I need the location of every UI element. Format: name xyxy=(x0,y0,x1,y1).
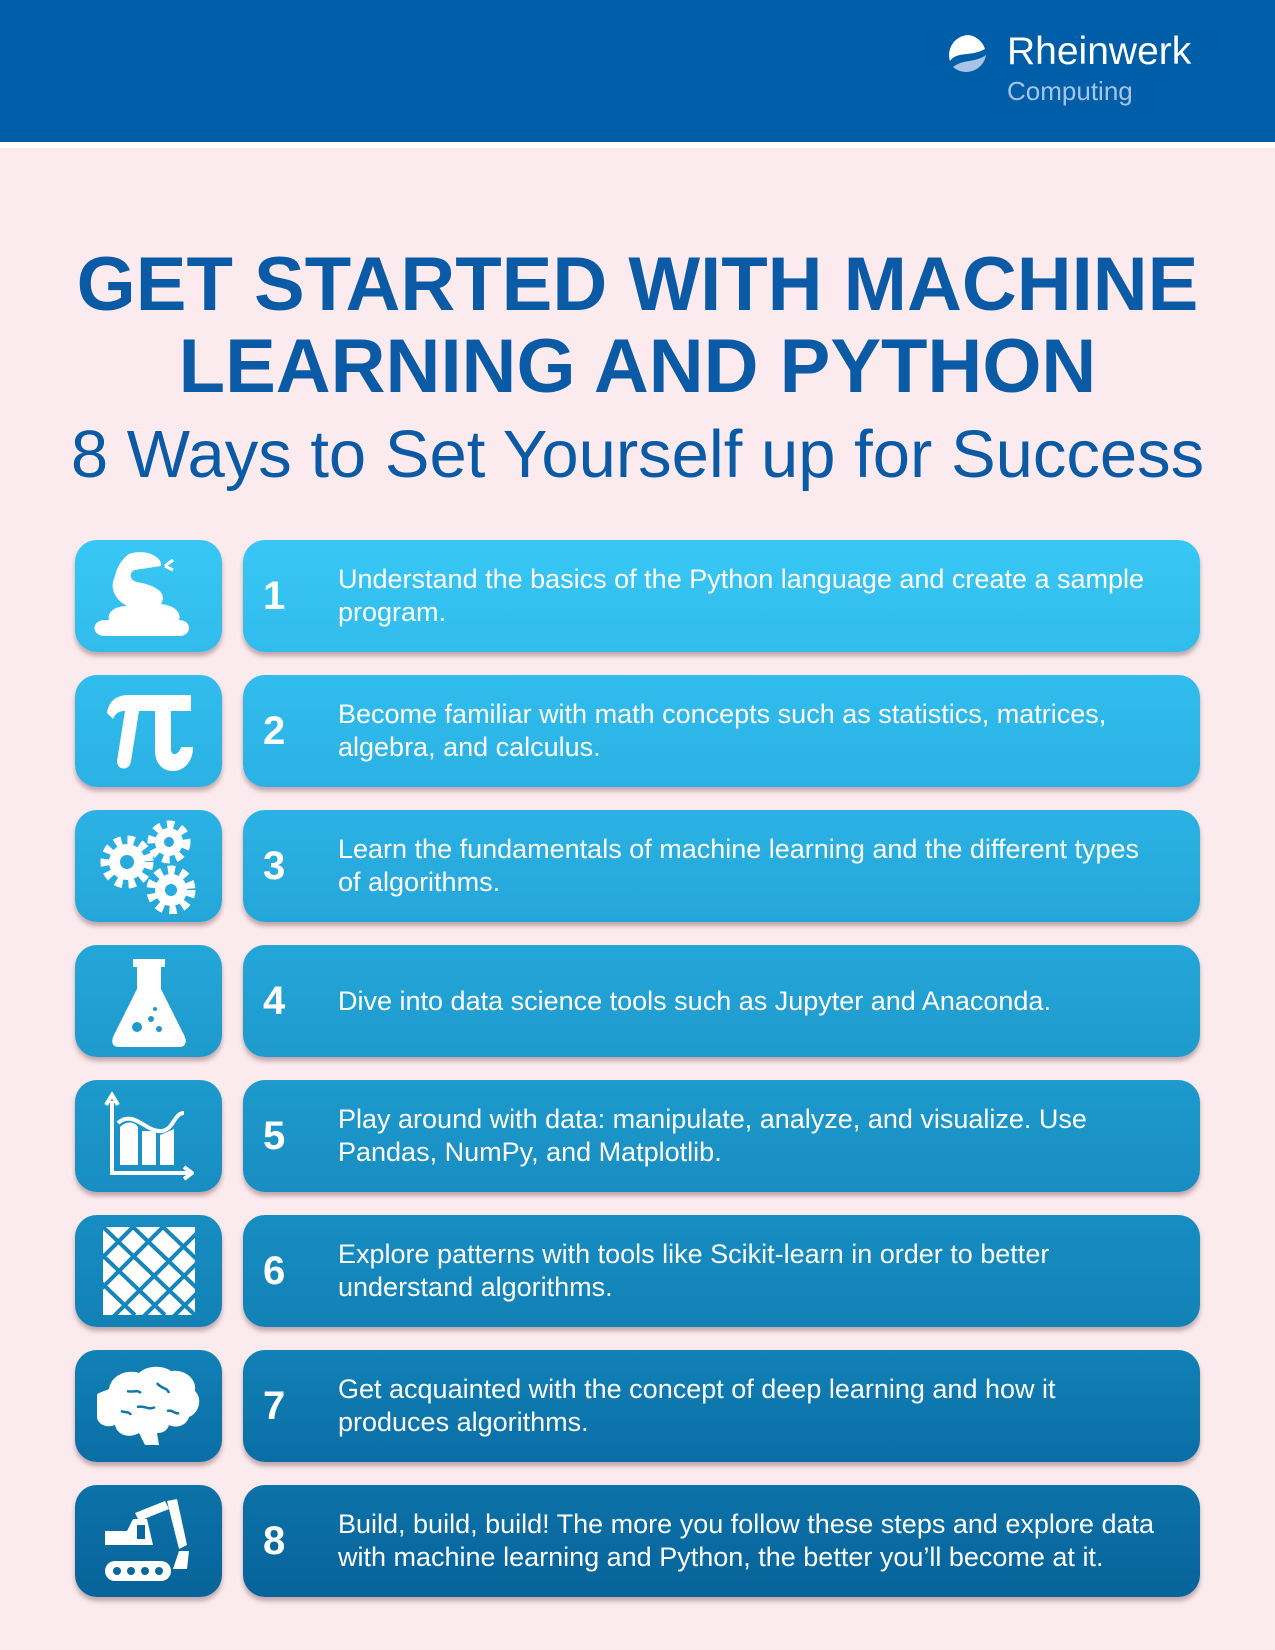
logo: Rheinwerk xyxy=(1007,30,1191,73)
step 3 box: 3 xyxy=(263,844,285,888)
subtitle: 8 Ways to Set Yourself up for Success xyxy=(71,417,1204,492)
title: LEARNING AND PYTHON xyxy=(179,324,1096,409)
icon: brain xyxy=(75,1350,222,1462)
step 1 box: 1 xyxy=(263,574,285,618)
icon: snake xyxy=(75,540,222,652)
step 3 box: Learn the fundamentals of machine learning and the different types of algorithms. xyxy=(338,834,1139,897)
step 8 box: Build, build, build! The more you follow these steps and explore data with machine learning and Python, the better you’ll become at it. xyxy=(338,1509,1154,1572)
row 8 xyxy=(72,1485,1203,1604)
icon: gears xyxy=(75,810,222,922)
header band xyxy=(0,0,1275,142)
step 5 box: 5 xyxy=(263,1114,285,1158)
step 4 box: Dive into data science tools such as Jupyter and Anaconda. xyxy=(338,986,1051,1016)
step 8 box: 8 xyxy=(263,1518,285,1562)
icon: pattern xyxy=(75,1215,222,1327)
row 5 xyxy=(72,1080,1203,1199)
icon: flask xyxy=(75,945,222,1057)
row 1 xyxy=(72,540,1203,659)
row 7 xyxy=(72,1350,1203,1469)
step 7 box: 7 xyxy=(263,1384,285,1428)
step 8 box xyxy=(243,1485,1200,1597)
step 6 box xyxy=(243,1215,1200,1327)
step 4 box xyxy=(243,945,1200,1057)
step 1 box: Understand the basics of the Python language and create a sample program. xyxy=(338,564,1144,627)
row 6 xyxy=(72,1215,1203,1334)
step 4 box: 4 xyxy=(263,978,285,1022)
step 2 box xyxy=(243,675,1200,787)
step 7 box xyxy=(243,1350,1200,1462)
icon: excavator xyxy=(75,1485,222,1597)
row 4 xyxy=(72,945,1203,1064)
icon: chart xyxy=(75,1080,222,1192)
step 5 box: Play around with data: manipulate, analyze, and visualize. Use Pandas, NumPy, and Matplotlib. xyxy=(338,1104,1087,1167)
step 3 box xyxy=(243,810,1200,922)
icon: pi xyxy=(75,675,222,787)
step 2 box: 2 xyxy=(263,708,285,752)
step 1 box xyxy=(243,540,1200,652)
step 7 box: Get acquainted with the concept of deep learning and how it produces algorithms. xyxy=(338,1374,1056,1437)
step 2 box: Become familiar with math concepts such as statistics, matrices, algebra, and calculus. xyxy=(338,699,1106,762)
title: GET STARTED WITH MACHINE xyxy=(77,242,1198,327)
step 6 box: 6 xyxy=(263,1248,285,1292)
row 2 xyxy=(72,675,1203,794)
row 3 xyxy=(72,810,1203,929)
step 5 box xyxy=(243,1080,1200,1192)
step 6 box: Explore patterns with tools like Scikit-learn in order to better understand algorithms. xyxy=(338,1239,1049,1302)
title xyxy=(77,242,1198,409)
logo: Computing xyxy=(1007,76,1133,106)
logo xyxy=(949,30,1192,106)
